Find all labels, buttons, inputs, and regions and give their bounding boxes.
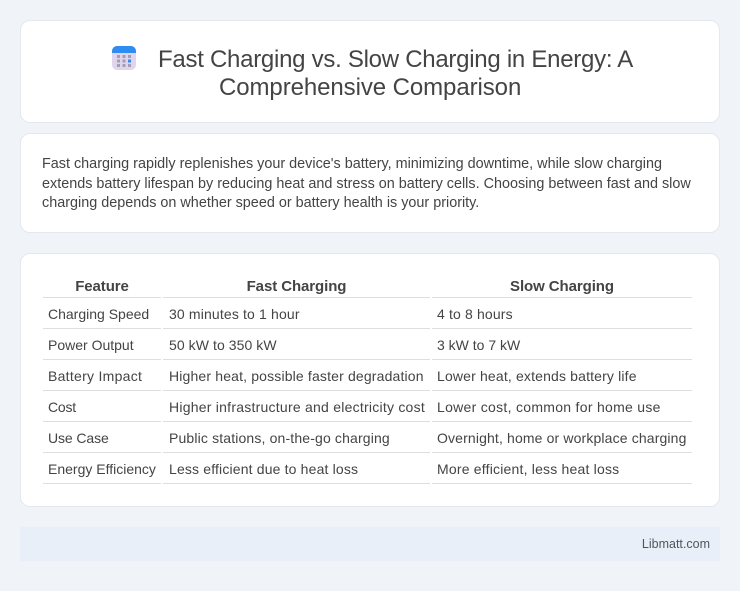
text block: introduction: charging depends on whether speed or battery health is your priority. xyxy=(42,195,479,211)
panel: introduction xyxy=(20,133,720,233)
panel: comparison table xyxy=(20,253,720,507)
comparison table: Less efficient due to heat loss xyxy=(169,461,358,477)
comparison table: Battery Impact xyxy=(48,368,142,384)
comparison table: Overnight, home or workplace charging xyxy=(437,430,687,446)
comparison table: Power Output xyxy=(48,337,134,353)
comparison table: More efficient, less heat loss xyxy=(437,461,619,477)
comparison table: 4 to 8 hours xyxy=(437,306,513,322)
title: Fast Charging vs. Slow Charging in Energy: A xyxy=(158,46,633,73)
comparison table: Charging Speed xyxy=(48,306,149,322)
text block: introduction xyxy=(42,156,691,211)
comparison table: 50 kW to 350 kW xyxy=(169,337,277,353)
title: Comprehensive Comparison xyxy=(219,74,521,101)
comparison table: Cost xyxy=(48,399,76,415)
comparison table: Lower heat, extends battery life xyxy=(437,368,637,384)
comparison table: Higher heat, possible faster degradation xyxy=(169,368,424,384)
comparison table: Public stations, on-the-go charging xyxy=(169,430,390,446)
footer xyxy=(20,527,720,561)
text block: introduction: extends battery lifespan by reducing heat and stress on battery cells. Choosing between fast and slow xyxy=(42,176,691,192)
icon: calendar xyxy=(112,46,136,70)
header: fast charging: Fast Charging xyxy=(247,278,346,295)
comparison table: Lower cost, common for home use xyxy=(437,399,661,415)
comparison table: Use Case xyxy=(48,430,109,446)
comparison table: 3 kW to 7 kW xyxy=(437,337,520,353)
footer text: Libmatt.com xyxy=(642,537,710,551)
panel: title card xyxy=(20,20,720,123)
comparison table xyxy=(43,278,692,484)
title xyxy=(158,46,634,101)
comparison table: 30 minutes to 1 hour xyxy=(169,306,300,322)
comparison table: Higher infrastructure and electricity cost xyxy=(169,399,425,415)
comparison table: Energy Efficiency xyxy=(48,461,156,477)
header: feature: Feature xyxy=(75,278,129,295)
header: slow charging: Slow Charging xyxy=(510,278,614,295)
text block: introduction: Fast charging rapidly replenishes your device's battery, minimizing downtime, while slow charging xyxy=(42,156,662,172)
